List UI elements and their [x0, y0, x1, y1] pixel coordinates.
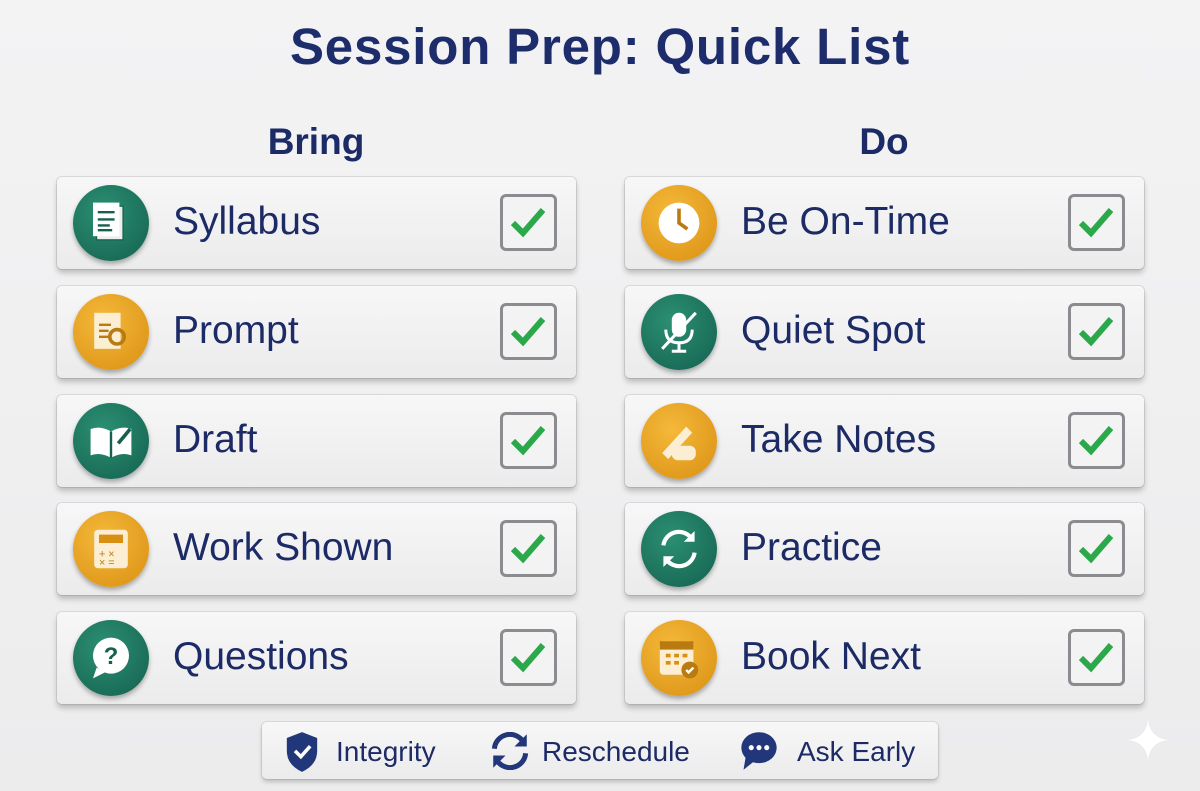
icon: muted mic — [641, 294, 717, 370]
icon: clock — [641, 185, 717, 261]
card: Work Shown — [57, 503, 576, 595]
icon: shield — [286, 732, 318, 772]
icon: reschedule — [492, 732, 528, 770]
checkbox — [500, 520, 557, 577]
checkbox — [500, 194, 557, 251]
label: Take Notes — [741, 418, 936, 461]
card: Practice — [625, 503, 1144, 595]
icon: calculator: × = — [99, 557, 115, 569]
icon: question bubble — [73, 620, 149, 696]
checkbox — [500, 303, 557, 360]
label: Prompt — [173, 309, 299, 352]
icon: calculator — [73, 511, 149, 587]
icon: question bubble: ? — [104, 643, 118, 670]
heading: Bring: Bring — [268, 121, 364, 162]
checkbox — [1068, 629, 1125, 686]
checkbox — [1068, 303, 1125, 360]
label: Work Shown — [173, 526, 393, 569]
card: Draft — [57, 395, 576, 487]
label: Questions — [173, 635, 349, 678]
card: Prompt — [57, 286, 576, 378]
decorative sparkle — [1130, 722, 1166, 758]
title: Session Prep: Quick List — [290, 18, 910, 75]
label: Draft — [173, 418, 258, 461]
label: Practice — [741, 526, 882, 569]
footer bar — [262, 722, 938, 779]
text: Ask Early: Ask Early — [797, 736, 915, 767]
card: Quiet Spot — [625, 286, 1144, 378]
checkbox — [500, 412, 557, 469]
label: Be On-Time — [741, 200, 950, 243]
icon: cycle — [641, 511, 717, 587]
card: Book Next — [625, 612, 1144, 704]
checkbox — [500, 629, 557, 686]
text: Reschedule: Reschedule — [542, 736, 690, 767]
icon: writing hand — [641, 403, 717, 479]
icon: calendar — [641, 620, 717, 696]
icon: syllabus — [73, 185, 149, 261]
checkbox — [1068, 520, 1125, 577]
checkbox — [1068, 194, 1125, 251]
label: Quiet Spot — [741, 309, 925, 352]
icon: chat bubble — [741, 732, 777, 770]
checkbox — [1068, 412, 1125, 469]
card: Syllabus — [57, 177, 576, 269]
card: Take Notes — [625, 395, 1144, 487]
icon: book — [73, 403, 149, 479]
card: Questions — [57, 612, 576, 704]
label: Book Next — [741, 635, 921, 678]
label: Syllabus — [173, 200, 320, 243]
icon: calculator: + × — [99, 548, 115, 560]
icon: prompt — [73, 294, 149, 370]
text: Integrity: Integrity — [336, 736, 436, 767]
card: Be On-Time — [625, 177, 1144, 269]
heading: Do: Do — [859, 121, 909, 162]
